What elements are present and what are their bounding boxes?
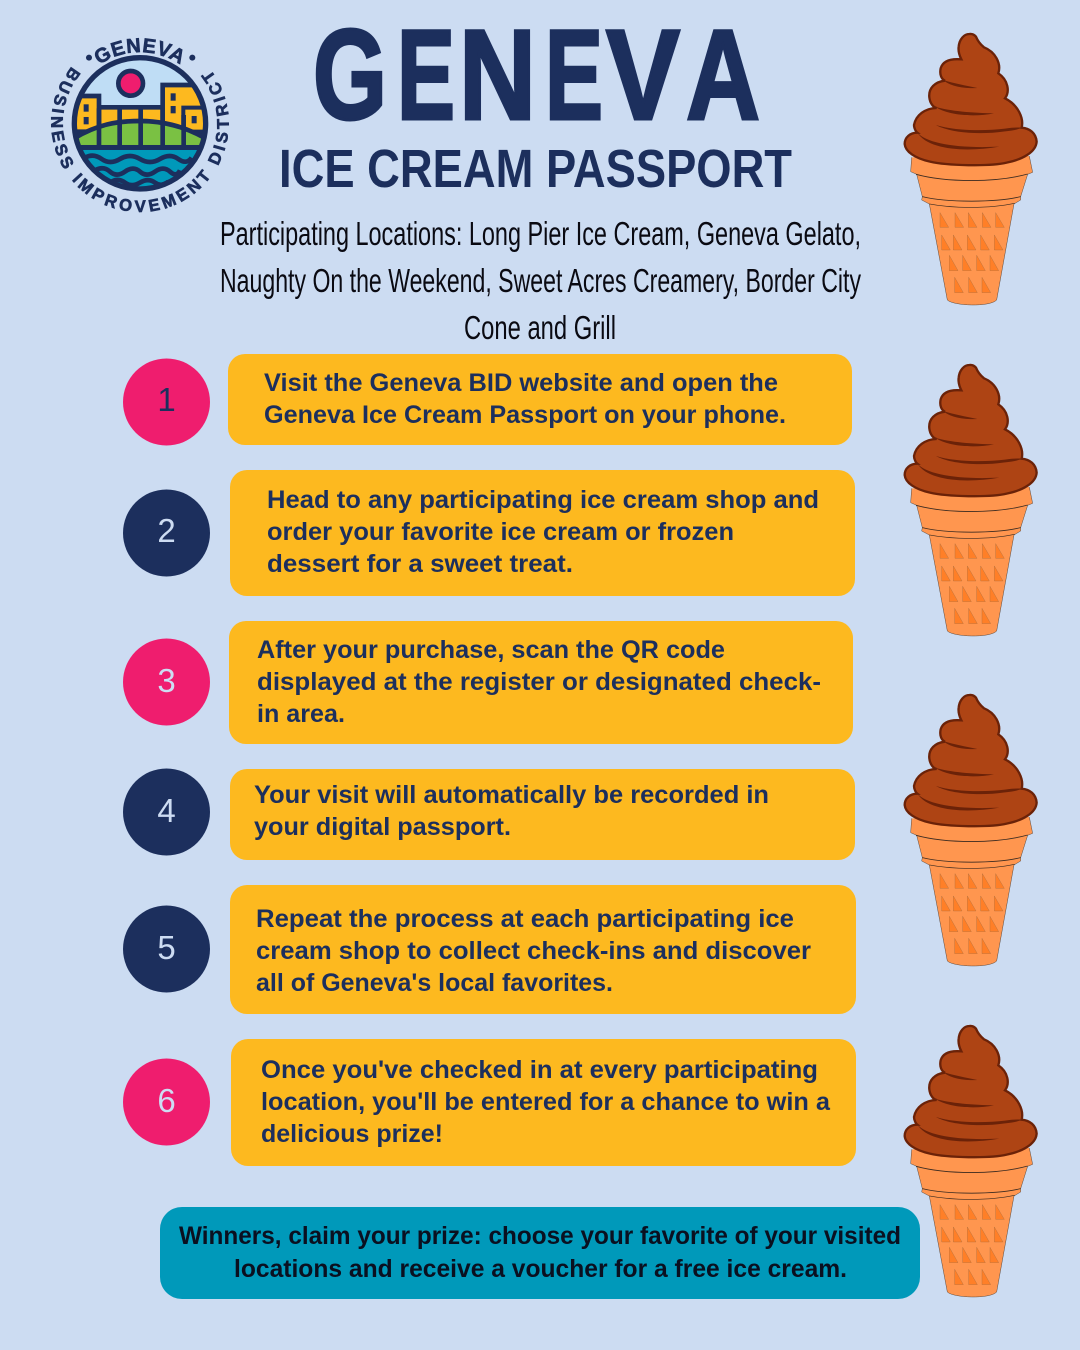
step 2 bbox=[123, 470, 855, 596]
step 2 card: Head to any participating ice cream shop and bbox=[267, 486, 819, 514]
number badge 4 bbox=[123, 768, 210, 856]
step 2 card: order your favorite ice cream or frozen bbox=[267, 518, 734, 546]
logo arc text: GENEVA: GENEVA bbox=[94, 38, 182, 65]
title: GENEVA: A bbox=[686, 4, 760, 147]
logo dot left bbox=[86, 55, 92, 61]
step 6 bbox=[123, 1039, 856, 1166]
step 4 card: Your visit will automatically be recorded in bbox=[254, 781, 769, 809]
step 2 card: dessert for a sweet treat. bbox=[267, 550, 573, 578]
number badge 2 bbox=[123, 490, 210, 576]
step 2 card bbox=[230, 470, 855, 596]
number badge 2: 2 bbox=[157, 512, 176, 549]
step 1 card bbox=[228, 354, 852, 445]
step 6 card: Once you've checked in at every participating bbox=[261, 1056, 818, 1084]
step 4 card: your digital passport. bbox=[254, 813, 511, 841]
participating locations text bbox=[220, 215, 861, 346]
step 1 card: Visit the Geneva BID website and open the bbox=[264, 369, 778, 397]
step 3 card: in area. bbox=[257, 700, 345, 728]
step 5 bbox=[123, 885, 856, 1014]
icon: ice cream cone 1 bbox=[905, 34, 1037, 305]
step 6 card: location, you'll be entered for a chance to win a bbox=[261, 1088, 831, 1116]
logo dot right bbox=[189, 55, 195, 61]
number badge 6 bbox=[123, 1058, 210, 1146]
title: GENEVA: V bbox=[606, 4, 680, 147]
step 6 card bbox=[231, 1039, 856, 1166]
step 5 card: all of Geneva's local favorites. bbox=[256, 969, 613, 997]
winners callout: Winners, claim your prize: choose your favorite of your visited bbox=[179, 1222, 901, 1250]
step 6 card: delicious prize! bbox=[261, 1120, 443, 1148]
step 4 card bbox=[230, 769, 855, 860]
title: GENEVA: E bbox=[397, 4, 455, 147]
logo: Geneva Business Improvement District bbox=[50, 38, 230, 212]
number badge 3: 3 bbox=[157, 662, 176, 699]
title: GENEVA: G bbox=[313, 4, 387, 147]
logo arc text: BUSINESS IMPROVEMENT DISTRICT: BUSINESS IMPROVEMENT DISTRICT bbox=[50, 66, 230, 212]
step 5 card bbox=[230, 885, 856, 1014]
winners callout: locations and receive a voucher for a free ice cream. bbox=[234, 1255, 847, 1283]
logo scene bbox=[70, 58, 210, 193]
number badge 1 bbox=[123, 358, 210, 446]
step 5 card: cream shop to collect check-ins and discover bbox=[256, 937, 811, 965]
participating locations text: Cone and Grill bbox=[464, 309, 616, 346]
step 3 card: displayed at the register or designated check- bbox=[257, 668, 821, 696]
number badge 5 bbox=[123, 906, 210, 992]
title: GENEVA: N bbox=[459, 4, 536, 147]
title: GENEVA: E bbox=[545, 4, 603, 147]
icon: ice cream cone 3 bbox=[905, 695, 1037, 966]
number badge 5: 5 bbox=[157, 929, 176, 966]
icon: ice cream cone 4 bbox=[905, 1026, 1037, 1297]
step 3 card bbox=[229, 621, 853, 744]
winners callout bbox=[160, 1207, 920, 1299]
step 1 card: Geneva Ice Cream Passport on your phone. bbox=[264, 401, 786, 429]
step 3 card: After your purchase, scan the QR code bbox=[257, 636, 725, 664]
number badge 6: 6 bbox=[157, 1082, 176, 1119]
number badge 1: 1 bbox=[157, 381, 176, 418]
step 5 card: Repeat the process at each participating ice bbox=[256, 905, 794, 933]
number badge 4: 4 bbox=[157, 792, 176, 829]
number badge 3 bbox=[123, 638, 210, 726]
step 1 bbox=[123, 354, 852, 446]
icon: ice cream cone 2 bbox=[905, 365, 1037, 636]
subtitle: ICE CREAM PASSPORT: ICE CREAM PASSPORT bbox=[279, 139, 792, 199]
step 4 bbox=[123, 768, 855, 860]
step 3 bbox=[123, 621, 853, 744]
